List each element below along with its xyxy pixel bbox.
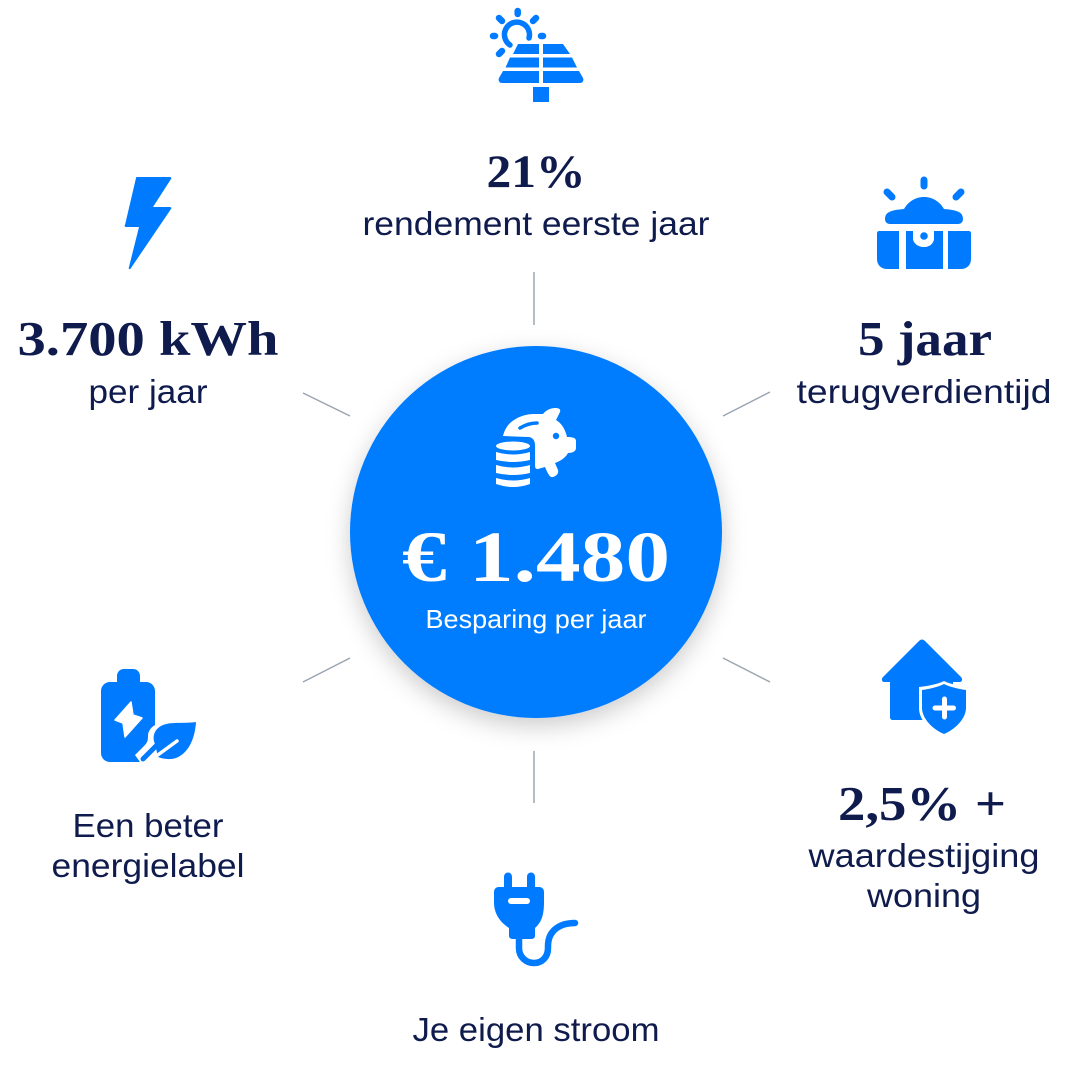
icon: electric plug	[494, 872, 575, 963]
label: woning	[866, 877, 981, 914]
label: energielabel	[52, 847, 244, 884]
icon: piggy bank with coins	[496, 408, 576, 487]
heading: 21%	[486, 146, 586, 198]
icon: house with shield	[882, 640, 969, 737]
heading: 5 jaar	[858, 311, 992, 366]
panel: eigen stroom	[412, 872, 660, 1048]
label: waardestijging	[807, 837, 1040, 874]
panel: terugverdientijd	[796, 180, 1052, 410]
central figure: € 1.480	[402, 517, 670, 597]
label: terugverdientijd	[796, 373, 1052, 410]
label: Een beter	[72, 807, 224, 844]
label: rendement eerste jaar	[362, 205, 710, 242]
panel: central savings circle	[350, 346, 722, 718]
heading: 3.700 kWh	[18, 311, 278, 366]
label: per jaar	[88, 373, 208, 410]
icon: treasure chest	[877, 180, 971, 269]
icon: battery with leaf	[101, 669, 196, 762]
central caption: Besparing per jaar	[426, 604, 647, 634]
panel: waardestijging	[807, 640, 1040, 914]
panel: energielabel	[52, 669, 244, 884]
panel: rendement	[362, 11, 710, 242]
heading: 2,5% +	[838, 776, 1006, 831]
icon: solar panel	[493, 11, 583, 102]
icon: lightning bolt	[125, 177, 171, 269]
label: Je eigen stroom	[412, 1011, 660, 1048]
panel: kWh	[18, 177, 278, 410]
